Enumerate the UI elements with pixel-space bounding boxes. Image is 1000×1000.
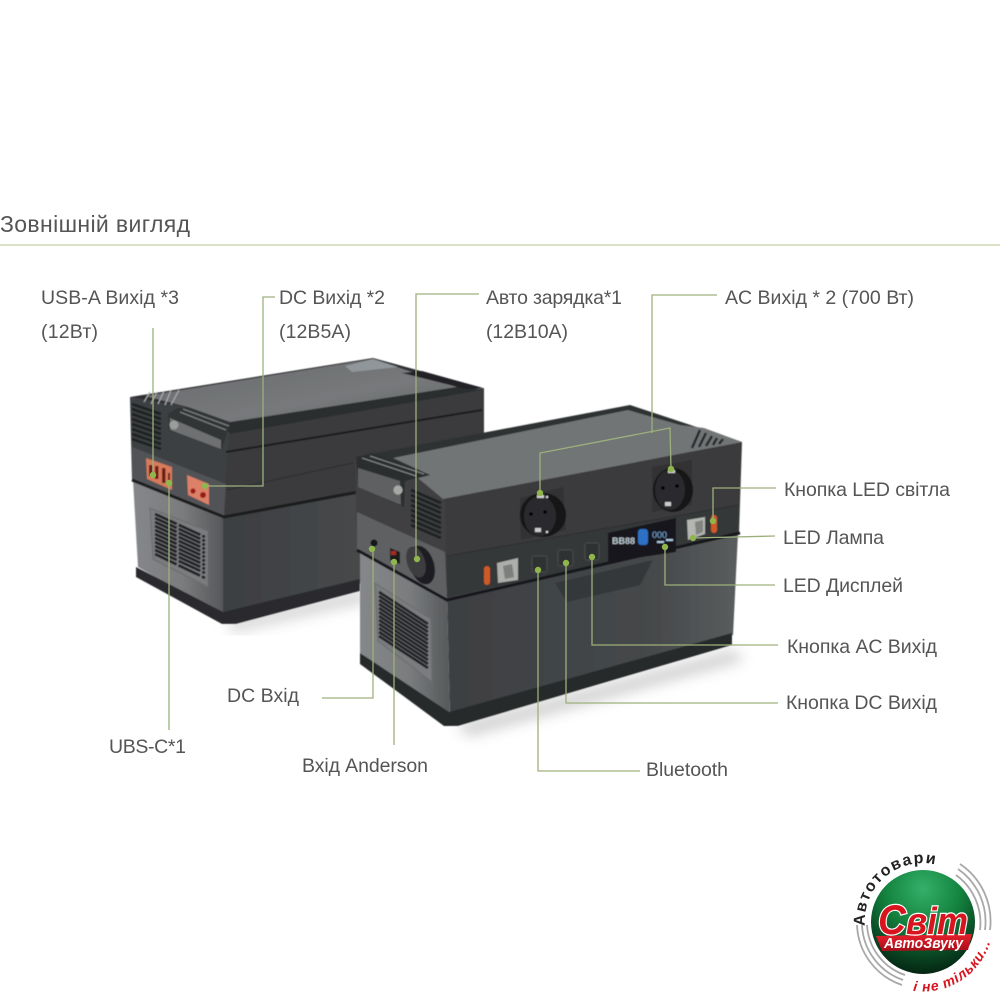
anderson, DC port, car socket xyxy=(370,539,440,588)
label: LED display: LED Дисплей xyxy=(783,575,903,597)
label: DC output xyxy=(279,287,385,343)
DC button leader xyxy=(566,563,778,703)
upper body xyxy=(223,388,484,517)
label: LED light button: Кнопка LED світла xyxy=(784,479,950,501)
label: DC input: DC Вхід xyxy=(227,685,300,707)
AC button leader xyxy=(592,557,778,645)
DC output leader xyxy=(205,297,275,486)
handle xyxy=(356,453,430,507)
base band xyxy=(136,567,360,624)
USB-A leader xyxy=(152,328,154,475)
socket left xyxy=(520,487,566,540)
buttons xyxy=(532,543,599,572)
label: DC output: (12В5А) xyxy=(279,321,351,343)
label: USB-C: UBS-C*1 xyxy=(109,736,186,758)
handle xyxy=(168,407,230,449)
leader lines and dots xyxy=(150,294,778,771)
socket right xyxy=(652,460,693,512)
logo: Світ АвтоЗвуку: Автотовари xyxy=(854,854,936,926)
product: rear power station xyxy=(130,358,484,632)
label: Anderson input: Вхід Anderson xyxy=(302,755,428,777)
upper body front xyxy=(443,442,742,598)
DC input leader xyxy=(322,549,373,698)
label: Bluetooth: Bluetooth xyxy=(646,759,728,781)
logo: Світ АвтоЗвуку: АвтоЗвуку xyxy=(883,936,964,952)
top panel xyxy=(130,358,483,433)
LED lamps xyxy=(484,515,717,585)
logo: Світ АвтоЗвуку: і не тільки... xyxy=(913,942,990,992)
LED button leader xyxy=(713,488,776,521)
label: DC output: DC Вихід *2 xyxy=(279,287,385,309)
LED display leader xyxy=(665,547,775,585)
logo: Світ АвтоЗвуку: Світ xyxy=(878,896,968,943)
AC output leader xyxy=(652,295,717,433)
car charging leader xyxy=(416,294,479,559)
vent panel xyxy=(150,508,208,587)
label: USB-A output xyxy=(41,287,179,343)
top vents xyxy=(692,430,723,448)
label: LED lamp: LED Лампа xyxy=(783,527,884,549)
label: USB-A output: (12Вт) xyxy=(41,321,98,343)
label: USB-A output: USB-A Вихід *3 xyxy=(41,287,179,309)
Anderson leader xyxy=(393,562,395,745)
base band xyxy=(360,633,732,726)
LED display: ВВ88 xyxy=(612,536,635,546)
Bluetooth leader xyxy=(538,570,640,771)
top panel xyxy=(355,405,742,497)
USB-C leader xyxy=(168,483,170,730)
vent panel xyxy=(375,583,432,682)
LED display xyxy=(608,518,676,562)
LED lamp leader xyxy=(693,536,775,538)
title: Зовнішній вигляд xyxy=(0,211,191,237)
product: front power station xyxy=(355,405,745,736)
lower body xyxy=(223,490,362,617)
display recess xyxy=(555,560,653,602)
logo: Світ АвтоЗвуку xyxy=(854,854,992,992)
LED display: 000 xyxy=(652,530,667,540)
side vent xyxy=(132,404,161,449)
label: car charging: (12В10А) xyxy=(486,321,568,343)
USB ports xyxy=(146,458,172,490)
DC ports xyxy=(187,475,209,505)
side vent xyxy=(411,490,441,538)
label: DC button: Кнопка DC Вихід xyxy=(786,692,938,714)
label: car charging: Авто зарядка*1 xyxy=(486,287,622,309)
label: AC output: AC Вихід * 2 (700 Вт) xyxy=(725,287,914,309)
label: AC button: Кнопка AC Вихід xyxy=(787,636,938,658)
lower body xyxy=(447,533,738,716)
label: car charging xyxy=(486,287,622,343)
